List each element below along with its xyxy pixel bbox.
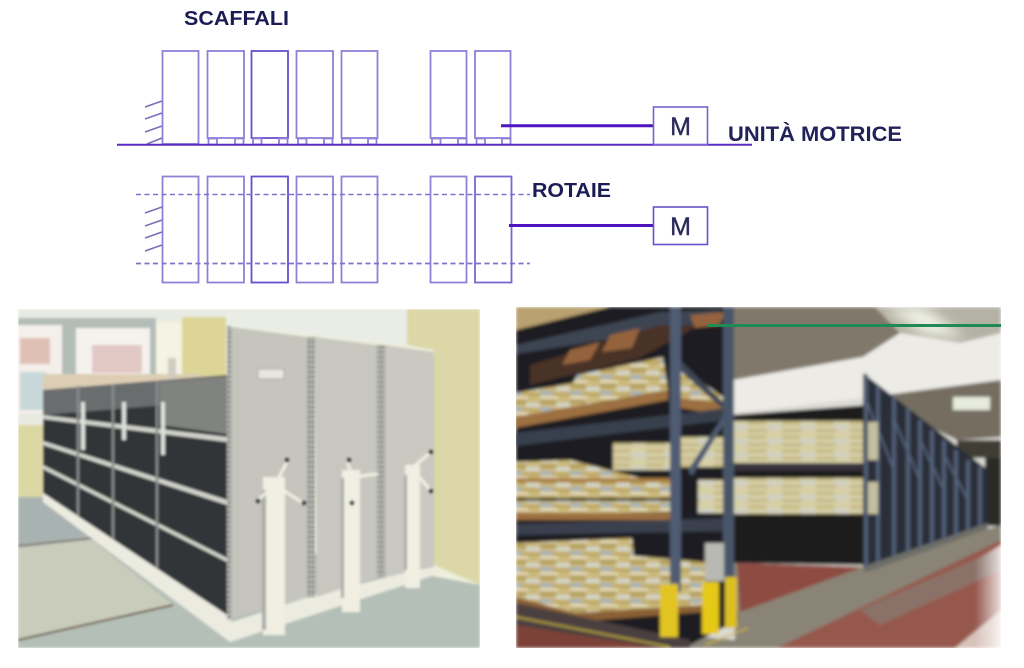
drive shaft, plan view bbox=[509, 224, 654, 227]
window bbox=[18, 317, 157, 376]
shelf 7 side view bbox=[475, 51, 510, 144]
lower pallets bbox=[516, 538, 705, 617]
motor unit, plan view: M bbox=[670, 213, 691, 241]
label: unità motrice: UNITÀ MOTRICE bbox=[728, 123, 902, 146]
shelf 2 plan view bbox=[208, 176, 244, 282]
ceiling bbox=[733, 307, 900, 380]
shelf 6 side view bbox=[430, 51, 466, 144]
bracing bbox=[677, 360, 726, 410]
diagram: side view of shelves bbox=[162, 51, 510, 144]
shelf 3 plan view bbox=[252, 176, 288, 282]
rail top bbox=[136, 194, 530, 196]
motor unit, side view bbox=[654, 107, 708, 144]
yellow guards bbox=[660, 584, 678, 637]
wall hatch, side view bbox=[145, 101, 162, 144]
diagram: plan view of shelves bbox=[162, 176, 512, 282]
fade bbox=[975, 545, 1001, 648]
shelf 1 plan view bbox=[162, 176, 198, 282]
mobile racks bbox=[863, 373, 988, 567]
label: scaffali: SCAFFALI bbox=[184, 8, 289, 30]
shelf 5 plan view bbox=[342, 176, 378, 282]
shelf 3 side view bbox=[252, 51, 288, 144]
uprights bbox=[670, 307, 681, 592]
upper pallets bbox=[515, 357, 668, 417]
front rack body bbox=[516, 307, 738, 645]
motor unit, plan view bbox=[654, 207, 708, 244]
shelf 1 side view bbox=[162, 51, 198, 144]
shelf 6 plan view bbox=[430, 176, 466, 282]
photo: office mobile shelving bbox=[18, 309, 480, 648]
motor unit, side view: M bbox=[670, 113, 691, 141]
shelf 5 side view bbox=[342, 51, 378, 144]
shelf 4 plan view bbox=[296, 176, 333, 282]
label: rotaie: ROTAIE bbox=[532, 179, 611, 202]
ground line bbox=[117, 144, 752, 146]
middle pallets bbox=[613, 443, 670, 470]
shelf 4 side view bbox=[296, 51, 333, 144]
shelf 7 plan view bbox=[475, 176, 512, 282]
green line bbox=[707, 324, 1001, 327]
floor bbox=[687, 523, 1001, 648]
wall hatch, plan view bbox=[145, 207, 162, 251]
drive shaft, side view bbox=[501, 124, 654, 127]
shelf 2 side view bbox=[208, 51, 244, 144]
rear shelves bbox=[733, 405, 868, 565]
rail bottom bbox=[136, 262, 530, 264]
photo: warehouse mobile racking bbox=[515, 307, 1001, 648]
